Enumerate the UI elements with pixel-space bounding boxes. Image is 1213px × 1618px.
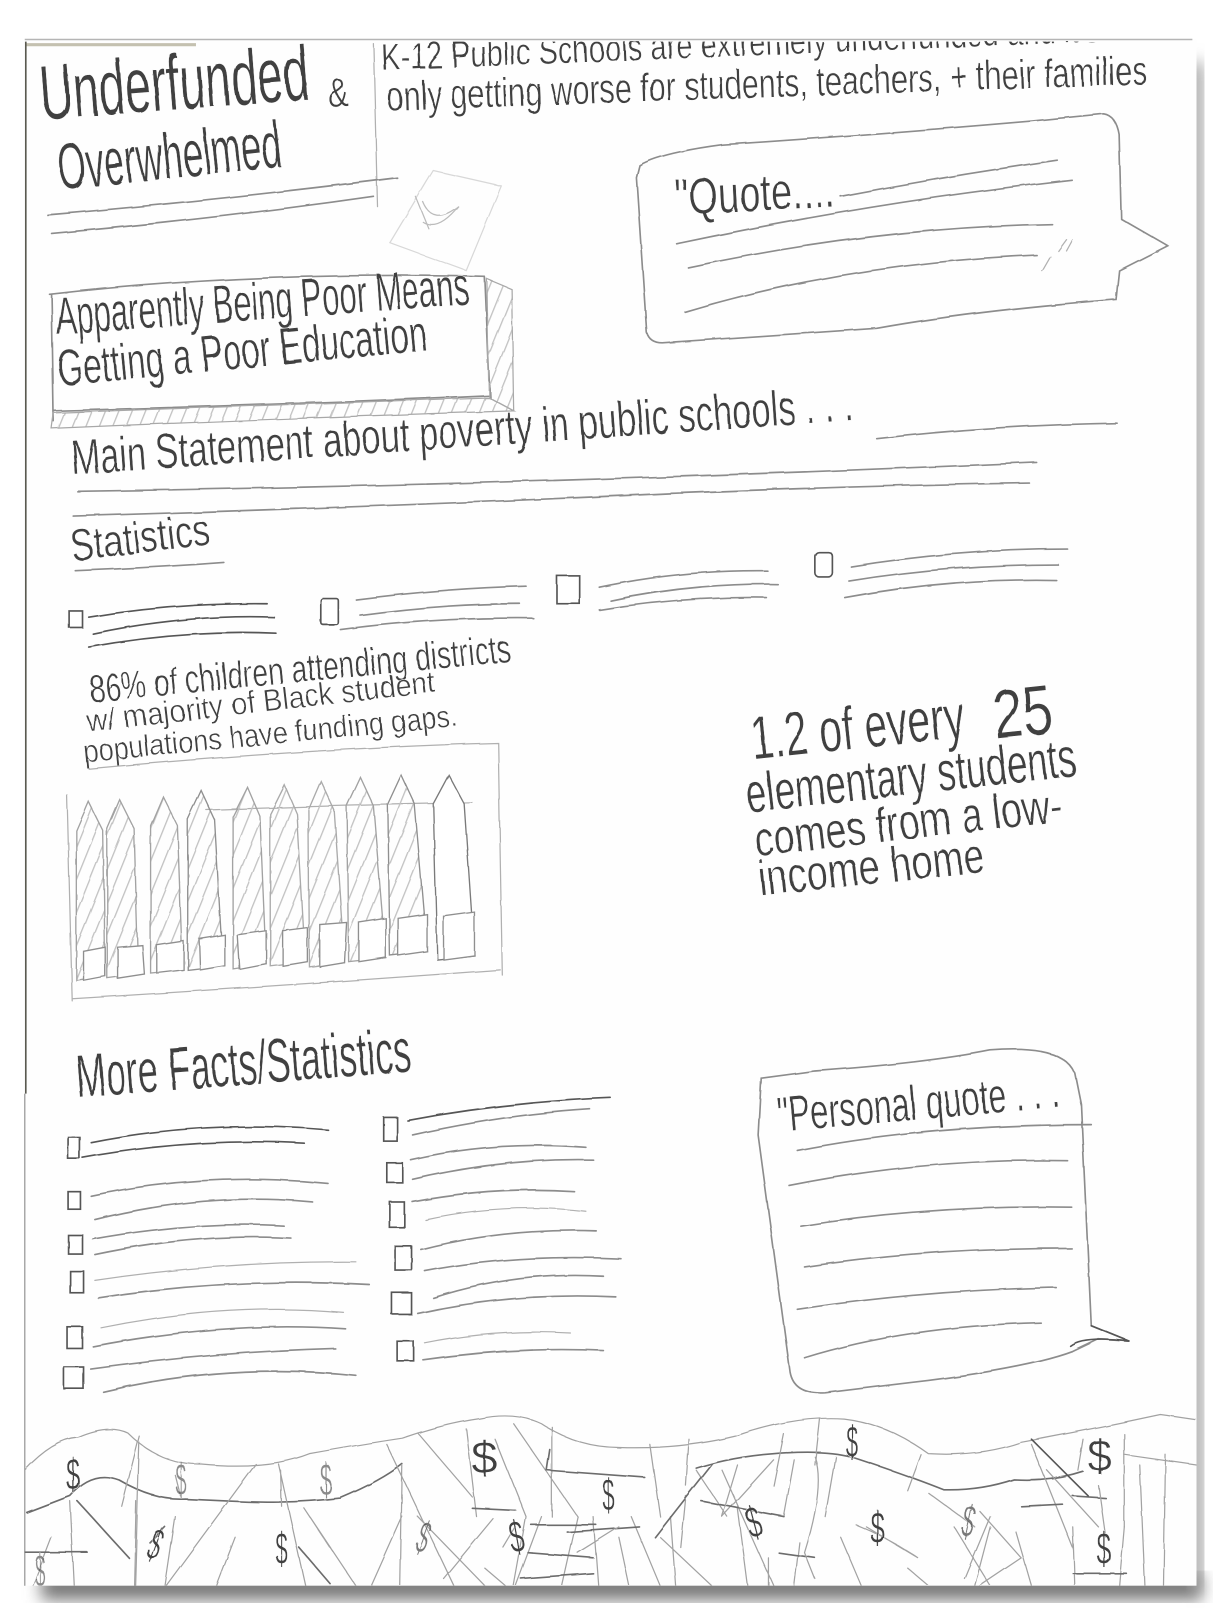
dollar signs on bills: $ (409, 1511, 437, 1563)
pencil 10 (433, 775, 474, 960)
fact 8 (387, 1145, 593, 1182)
statistic 2 (321, 586, 533, 630)
fact 9 (390, 1190, 586, 1228)
pencil chart caption: 86% of children attending districts (87, 628, 513, 712)
dollar signs on bills: $ (957, 1495, 980, 1548)
money pile (23, 1414, 1196, 1597)
dollar signs on bills: $ (275, 1523, 288, 1574)
pencil chart caption: populations have funding gaps. (82, 698, 459, 770)
quote opening text: "Quote.... (673, 160, 836, 226)
pencil chart caption (82, 628, 513, 770)
personal quote bubble (758, 1049, 1129, 1393)
title: Overwhelmed (54, 107, 285, 204)
dollar signs on bills: $ (66, 1449, 80, 1500)
quote bubble (636, 114, 1168, 343)
dollar signs on bills: $ (141, 1518, 170, 1570)
fact 5 (67, 1309, 346, 1348)
statistic 3 (557, 571, 778, 610)
bills (122, 1419, 1124, 1586)
big statistic: 1.2 of every 25: comes from a low- (751, 778, 1065, 867)
dollar signs on bills: $ (846, 1416, 858, 1467)
fact 10 (395, 1230, 621, 1271)
dollar signs on bills: $ (1096, 1523, 1111, 1574)
3D hatched edge (487, 279, 514, 411)
title: Underfunded (36, 28, 312, 137)
statistic 1 (69, 604, 276, 647)
dollar signs on bills: $ (175, 1454, 187, 1505)
statistic 4 (815, 549, 1068, 598)
pencil 3 (151, 797, 183, 973)
subheading box (50, 256, 514, 428)
dollar signs on bills (36, 1424, 1111, 1586)
personal quote bubble: "Personal quote . . . (775, 1063, 1062, 1143)
pencil erasers (84, 912, 474, 980)
more facts heading: More Facts/Statistics (73, 1017, 414, 1112)
statistics heading: Statistics (67, 504, 213, 571)
subheading box: Getting a Poor Education (54, 304, 429, 397)
dollar signs on bills: $ (602, 1469, 615, 1520)
title: & (327, 70, 350, 117)
dollar signs on bills: $ (506, 1511, 529, 1564)
main statement (69, 376, 1117, 516)
pile outline (23, 1414, 1195, 1471)
fact 4 (70, 1262, 369, 1298)
big statistic: 1.2 of every 25 (742, 670, 1079, 907)
pencil 4 (188, 790, 223, 970)
facts column 1 (64, 1127, 369, 1392)
pencil 9 (388, 775, 427, 955)
fact 6 (64, 1348, 356, 1392)
big statistic: 1.2 of every 25: 1.2 of every (747, 682, 968, 773)
pencil chart caption: w/ majority of Black student (84, 664, 437, 739)
dollar signs on bills: $ (320, 1454, 332, 1505)
facts column 2 (384, 1098, 621, 1361)
pencil 1 (76, 802, 105, 980)
pencil 7 (308, 781, 345, 967)
fact 1 (68, 1127, 328, 1159)
statistics row (69, 549, 1068, 647)
dollar signs on bills: $ (471, 1432, 498, 1483)
pencil 5 (233, 787, 266, 969)
pencil 8 (347, 777, 386, 962)
fact 3 (68, 1225, 291, 1255)
dollar signs on bills: $ (1087, 1430, 1112, 1481)
dollar signs on bills: $ (35, 1546, 45, 1597)
fact 2 (68, 1179, 328, 1220)
pencil 6 (270, 785, 305, 966)
dollar signs on bills: $ (871, 1502, 885, 1553)
big statistic: 1.2 of every 25: income home (756, 828, 987, 907)
pencil 2 (107, 800, 138, 978)
fact 12 (397, 1332, 603, 1361)
pencil chart (67, 743, 502, 1001)
fact 7 (384, 1098, 611, 1141)
subheading box: Apparently Being Poor Means (53, 256, 471, 346)
big statistic: 1.2 of every 25: 25 (989, 670, 1056, 754)
main statement: Main Statement about poverty in public schools . . . (69, 376, 855, 486)
dollar signs on bills: $ (740, 1496, 767, 1549)
icon: sketched paper (390, 171, 501, 271)
title (36, 28, 397, 233)
fact 11 (392, 1275, 616, 1314)
